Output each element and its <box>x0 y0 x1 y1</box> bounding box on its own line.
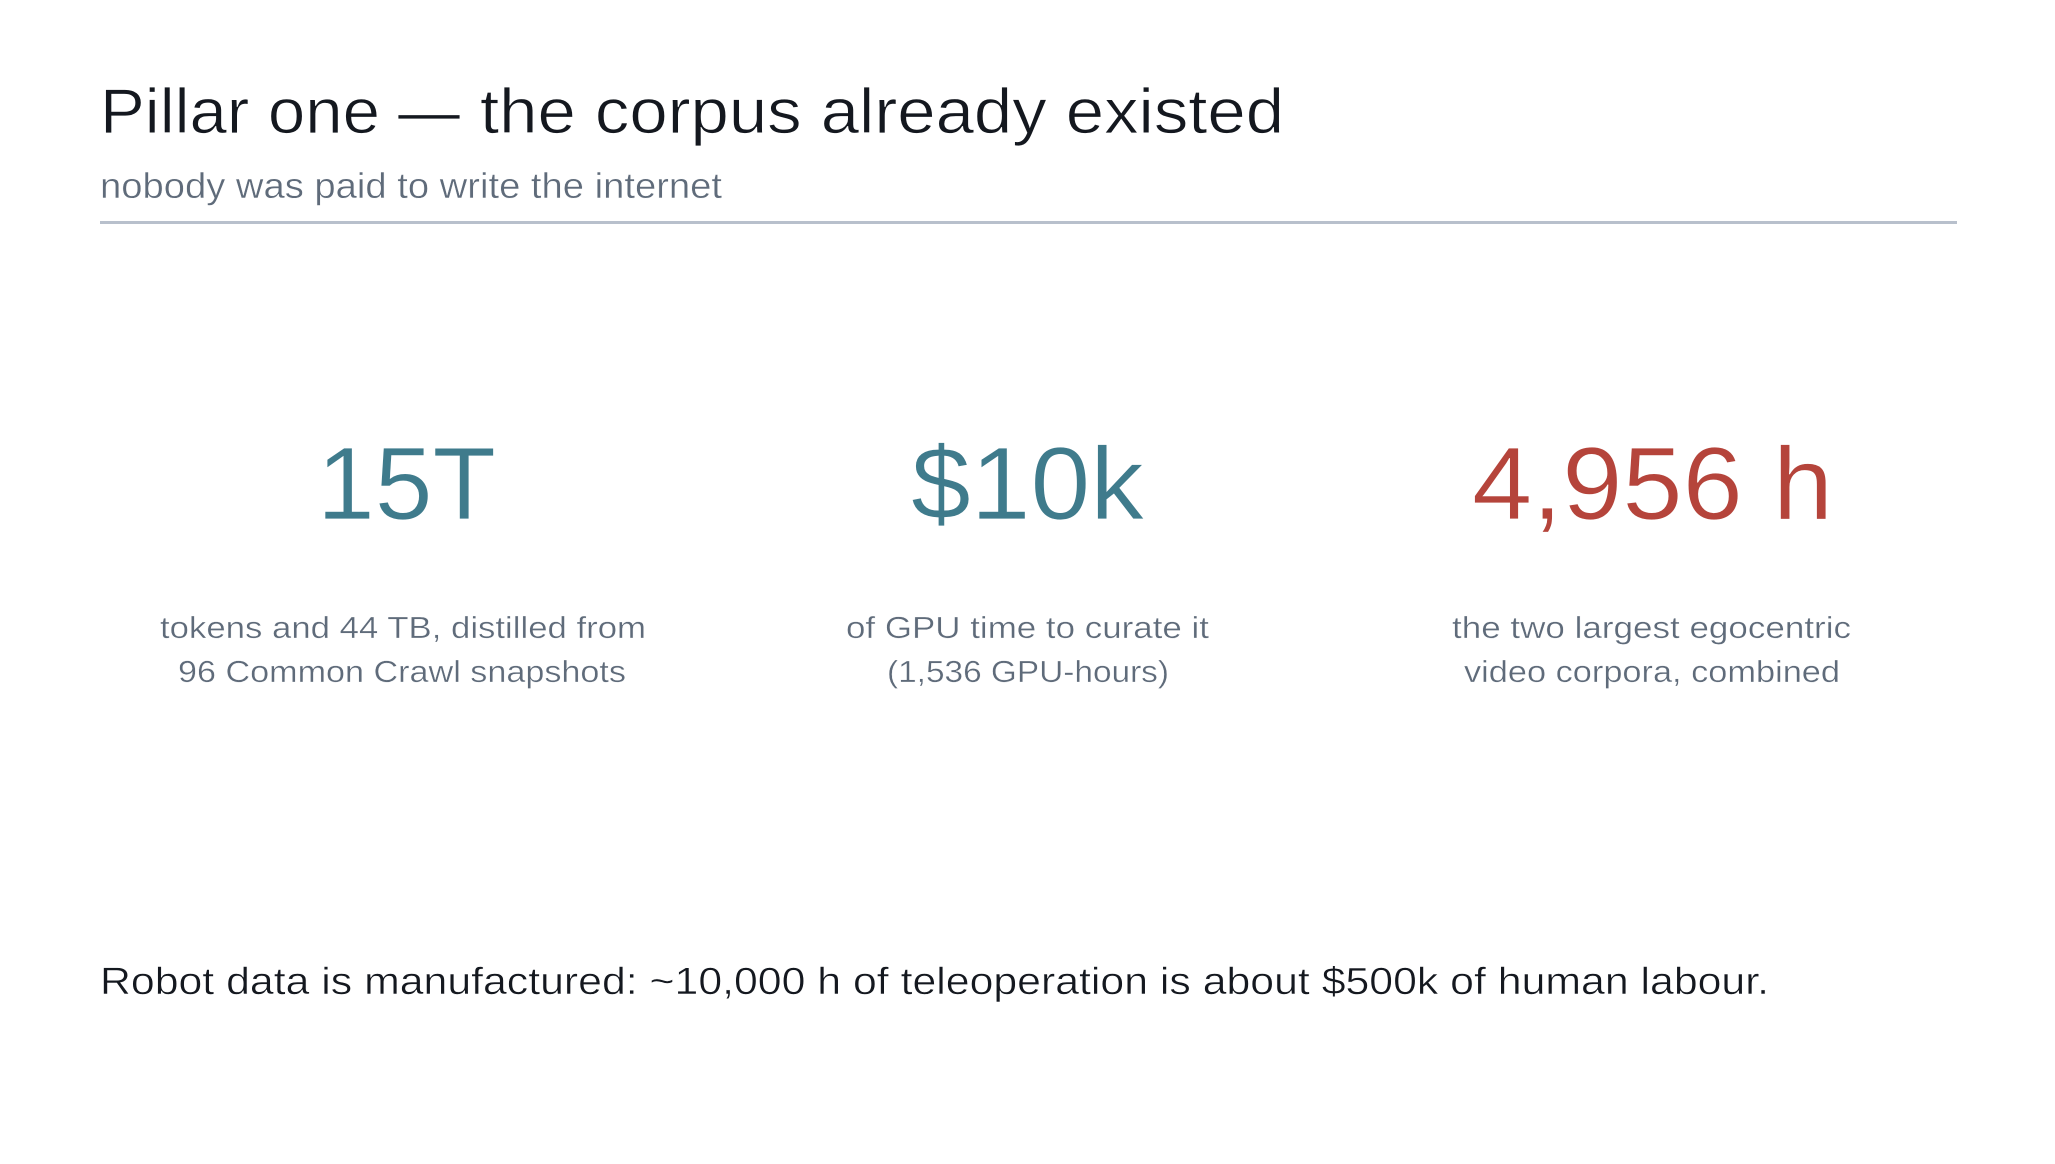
caption: (1,536 GPU-hours) <box>887 654 1169 689</box>
caption: the two largest egocentric <box>1452 610 1851 645</box>
number: 4,956 h <box>1472 426 1833 541</box>
caption: video corpora, combined <box>1464 654 1840 689</box>
title: the corpus already existed <box>480 77 1284 147</box>
subtitle: nobody was paid to write the internet <box>100 165 722 206</box>
caption: of GPU time to curate it <box>846 610 1209 645</box>
takeaway sentence: Robot data is manufactured: ~10,000 h of teleoperation is about $500k of human labour. <box>100 961 1769 1003</box>
caption <box>1452 610 1851 689</box>
caption: tokens and 44 TB, distilled from <box>160 610 646 645</box>
number: 15T <box>317 426 496 541</box>
caption <box>846 610 1209 689</box>
title: Pillar one <box>100 77 380 147</box>
number: $10k <box>911 426 1145 541</box>
stat: 15T <box>160 426 646 689</box>
caption: 96 Common Crawl snapshots <box>178 654 626 689</box>
title: — <box>398 77 460 147</box>
caption <box>160 610 646 689</box>
stat: $10k <box>846 426 1209 689</box>
stat: 4,956 h <box>1452 426 1851 689</box>
